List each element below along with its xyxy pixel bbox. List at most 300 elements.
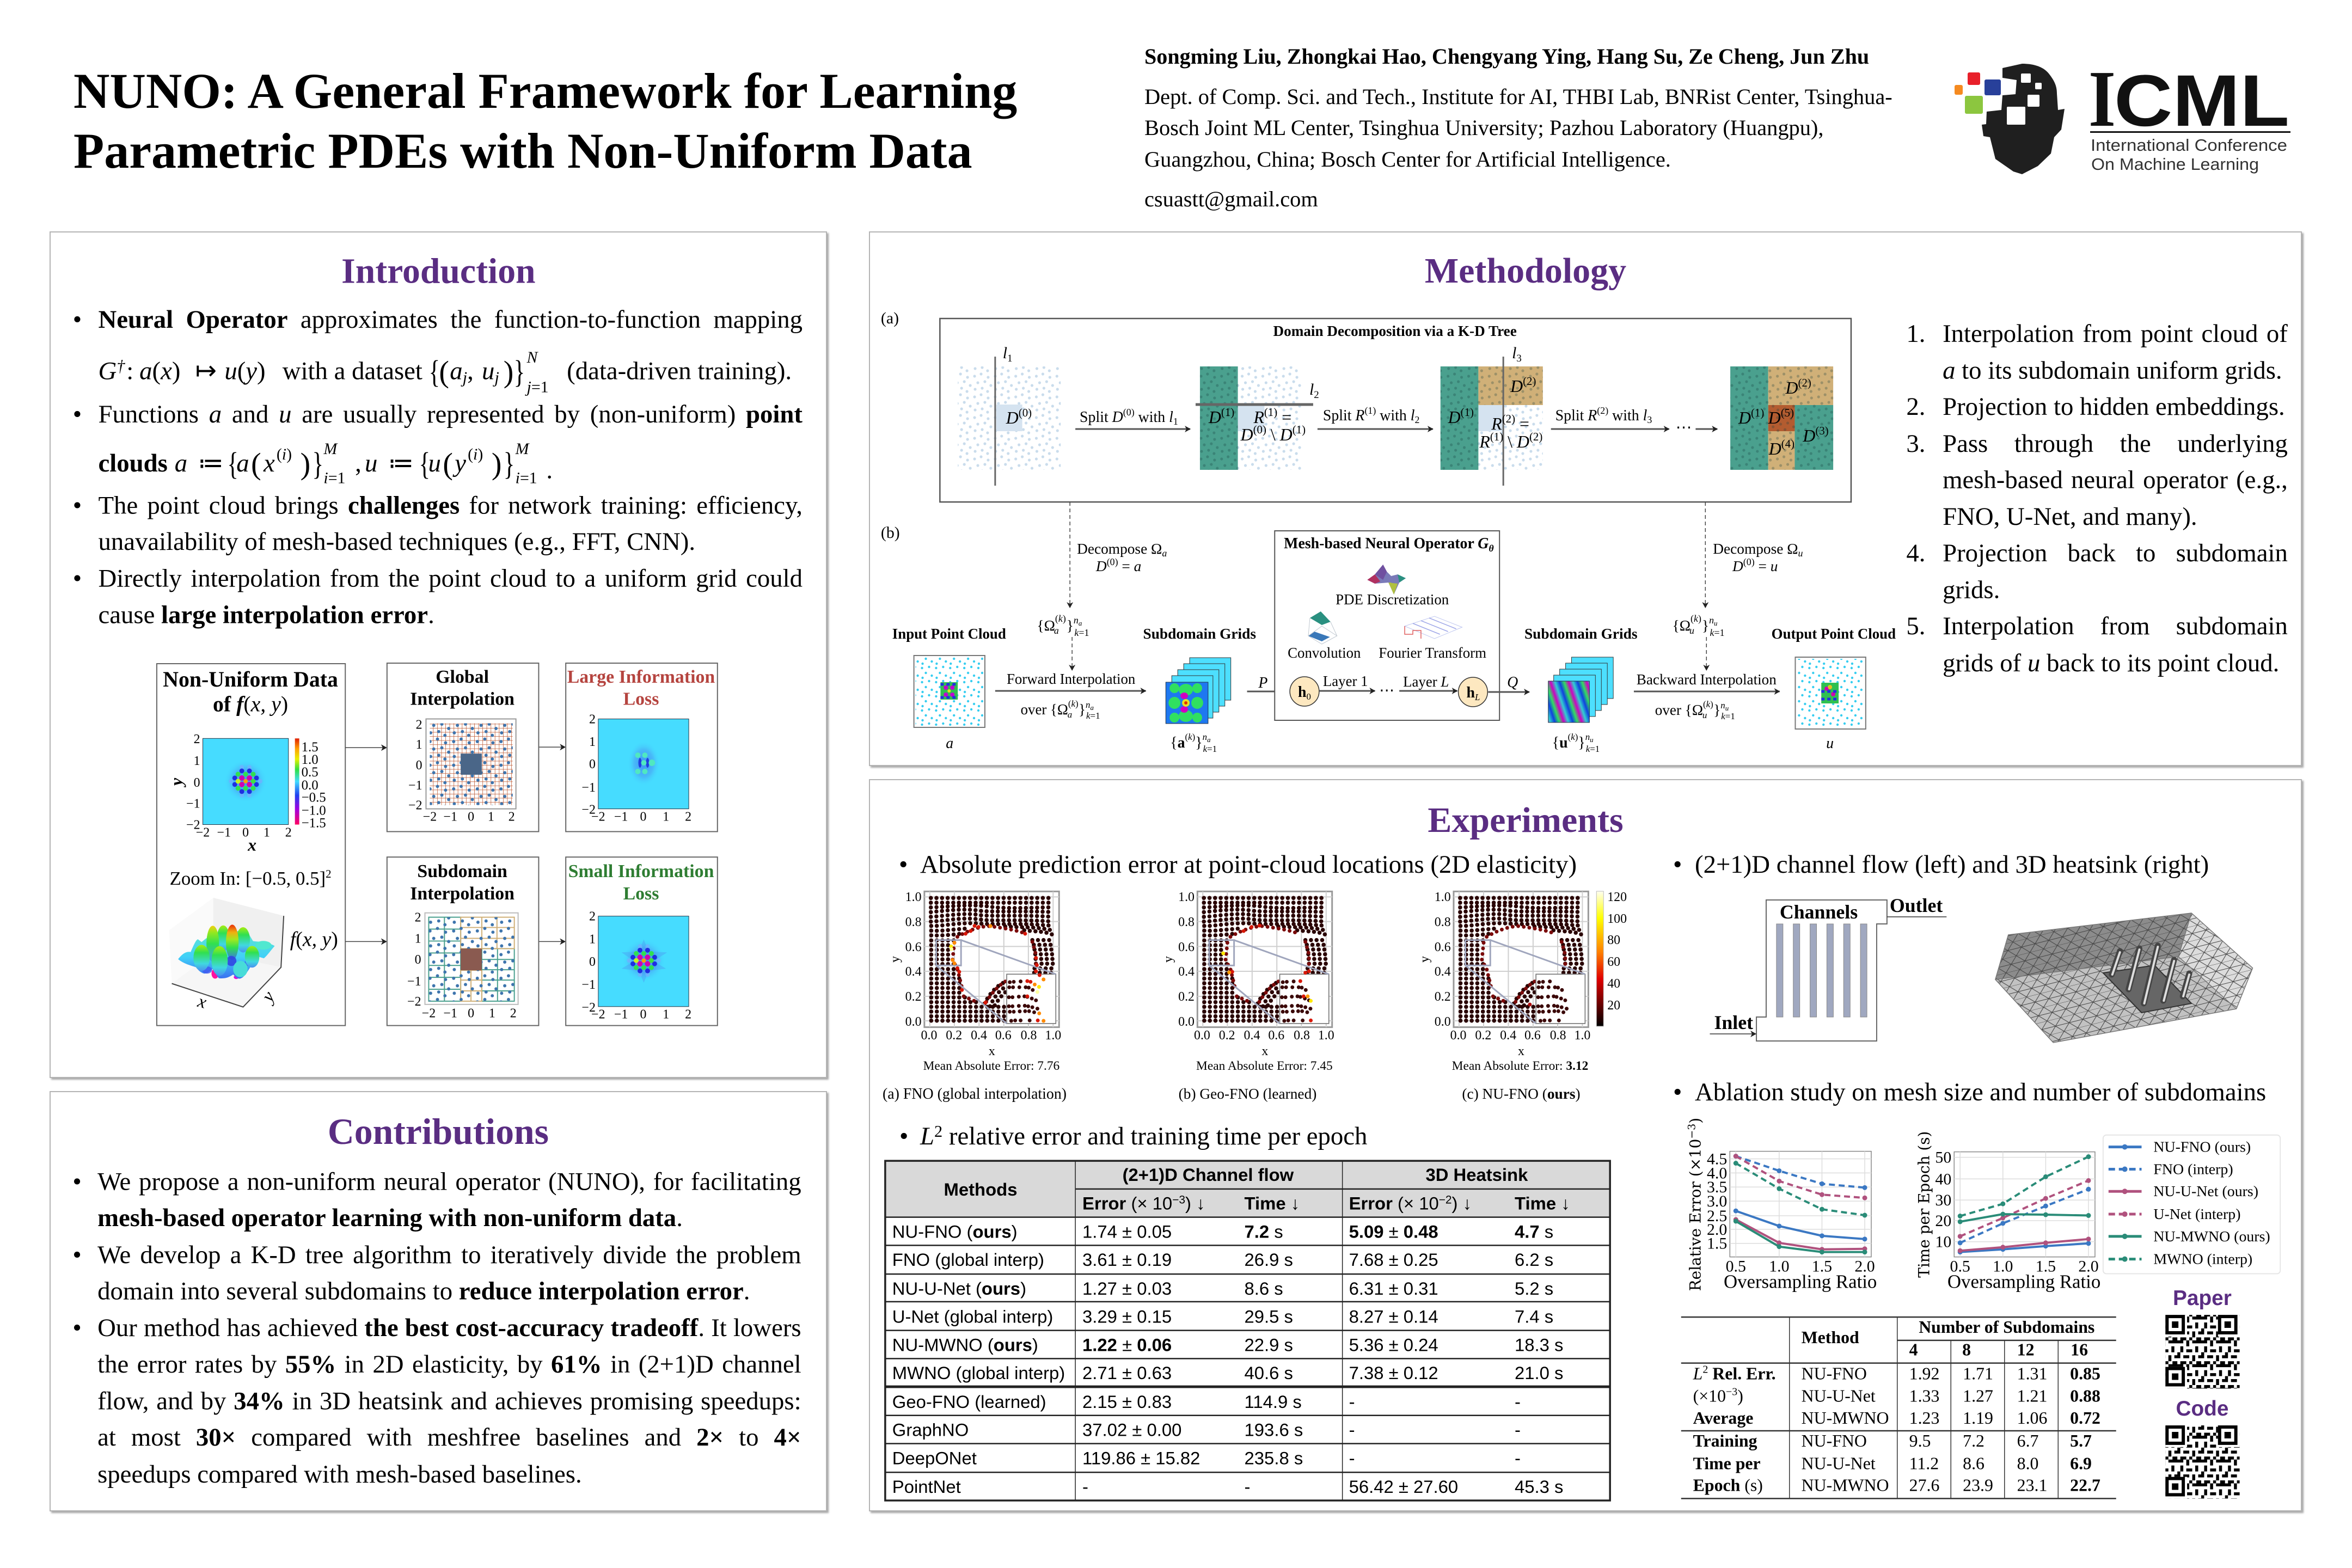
table rows: PointNet [892, 1477, 961, 1497]
input point cloud [892, 626, 1006, 752]
table rows: U-Net (global interp) [892, 1307, 1053, 1327]
table rows: 56.42 ± 27.60 [1349, 1477, 1458, 1497]
arrow Q [1488, 674, 1529, 692]
table rows: 6.31 ± 0.31 [1349, 1278, 1438, 1298]
text: introduction bullets: with a dataset [283, 357, 422, 385]
logo subtitle: International Conference [2091, 136, 2287, 155]
panel: global interpolation: 2 [415, 718, 422, 732]
text: introduction bullets: y [455, 449, 466, 477]
heatmap of f: −1.0 [302, 803, 326, 818]
error map: FNO: Mean Absolute Error: 7.76 [923, 1059, 1059, 1073]
heading: Contributions: Contributions [328, 1111, 549, 1152]
arrow: split R2: (2) [1597, 405, 1608, 416]
text: introduction bullets: { [419, 446, 430, 481]
diagram: 3D heatsink mesh [1995, 912, 2253, 1043]
error map: Geo-FNO: 0.6 [1178, 940, 1195, 954]
text: introduction bullets: } [504, 446, 514, 481]
text: introduction bullets: u [365, 449, 377, 477]
subdomain grids a: (k) [1185, 732, 1195, 742]
error map: Geo-FNO: Mean Absolute Error: 7.45 [1196, 1059, 1333, 1073]
panel: subdomain interpolation: 0 [414, 953, 421, 967]
panel: large information loss: 1 [663, 810, 669, 824]
table: subdomain study: 6.7 [2017, 1431, 2038, 1450]
table: subdomain study: 1.23 [1909, 1408, 1939, 1428]
panel: experiments: • [1673, 1078, 1682, 1106]
text: contribution bullets: mesh-based operator learning with non-uniform data. [97, 1204, 683, 1232]
panel: small information loss: −1 [614, 1008, 628, 1022]
panel: subdomain interpolation: 1 [489, 1007, 495, 1021]
step: second split: = [1515, 414, 1529, 433]
panel: small information loss: Loss [623, 884, 659, 904]
icon: Fourier transform [1405, 616, 1462, 639]
text: introduction bullets: ( [251, 448, 261, 481]
decompose labels: u [1771, 558, 1778, 574]
table: subdomain study: 1.71 [1963, 1364, 1993, 1383]
text: contribution bullets: • [72, 1241, 82, 1269]
panel: small information loss: 0 [589, 955, 596, 969]
panel: experiments: (2+1)D channel flow (left) and 3D heatsink (right) [1695, 850, 2209, 879]
panel: subdomain interpolation: 0 [468, 1007, 474, 1021]
error map: Geo-FNO: 1.0 [1178, 890, 1195, 904]
decompose labels: (k) [1055, 613, 1066, 624]
heatmap of f: 0.0 [302, 778, 318, 793]
panel: contributions [51, 1092, 826, 1510]
table: subdomain study: 23.1 [2017, 1475, 2047, 1494]
step: first split: l [1309, 381, 1314, 399]
table: subdomain study: NU-FNO [1802, 1364, 1867, 1383]
text: introduction bullets: (i) [277, 445, 292, 463]
decompose labels: Decompose Ω [1713, 541, 1798, 557]
error map: NU-FNO [1418, 890, 1590, 1102]
backward interpolation arrow: Backward Interpolation [1637, 671, 1777, 688]
subdomain grids u: n [1585, 732, 1594, 744]
step: second split: (1) [1490, 430, 1503, 443]
backward interpolation arrow: u [1725, 704, 1729, 712]
decompose labels: a [1162, 548, 1167, 559]
table rows: 235.8 s [1245, 1448, 1303, 1468]
error map: Geo-FNO: y [1161, 956, 1175, 963]
chart: relative error vs oversampling: Relative Error (×10 [1687, 1139, 1705, 1291]
table: subdomain study: 22.7 [2070, 1475, 2100, 1494]
text: introduction bullets: { [428, 354, 440, 389]
chart: time per epoch vs oversampling: 1.5 [2036, 1258, 2056, 1276]
panel: small information loss: −1 [581, 978, 596, 992]
table header: ) ↓ [1185, 1193, 1205, 1214]
subdomain grids a: {a [1170, 734, 1185, 751]
colorbar: 80 [1607, 933, 1620, 947]
step: initial point cloud: 1 [1007, 353, 1013, 364]
chart: relative error vs oversampling: 3.5 [1707, 1178, 1727, 1196]
panel: subdomain interpolation: 2 [414, 911, 421, 925]
QR: paper [2165, 1315, 2240, 1388]
table rows: - [1515, 1448, 1521, 1468]
label (a): (a) [881, 309, 899, 327]
text: introduction bullets: x [264, 449, 275, 477]
forward interpolation arrow: over {Ω [1021, 701, 1068, 718]
chart: relative error vs oversampling: 4.5 [1707, 1150, 1727, 1168]
text: numbered steps: Projection back to subdomain [1943, 539, 2288, 567]
table: subdomain study [1681, 1316, 2116, 1499]
table rows: 1.27 ± 0.03 [1082, 1278, 1172, 1298]
legend: NU-U-Net (ours) [2153, 1183, 2258, 1200]
QR codes: paper and code [2165, 1287, 2240, 1498]
text: contribution bullets: at most 30× compared with meshfree baselines and 2× to 4× [97, 1423, 801, 1451]
step: second split: D [1448, 408, 1461, 427]
panel: subdomain interpolation: Interpolation [410, 884, 514, 904]
table rows: 7.68 ± 0.25 [1349, 1250, 1438, 1270]
legend: NU-FNO (ours) [2153, 1139, 2251, 1156]
panel: large information loss: −1 [614, 810, 628, 824]
chart: time per epoch vs oversampling: Oversampling Ratio [1947, 1271, 2100, 1292]
subdomain grids a: } [1195, 734, 1203, 751]
step: final subdomains: (3) [1815, 424, 1829, 437]
text: introduction bullets: M [516, 440, 529, 458]
hidden layers: Layer L [1403, 673, 1449, 690]
heatmap of f: −0.5 [302, 791, 326, 805]
decompose labels: {Ω [1673, 617, 1690, 634]
error map: NU-FNO: 0.4 [1435, 965, 1451, 979]
arrow: split R1: l [1411, 407, 1415, 424]
text: introduction bullets: ↦ [195, 357, 217, 385]
text: introduction bullets: G† [98, 357, 125, 385]
panel: global interpolation: −1 [408, 779, 422, 793]
table: subdomain study: 0.88 [2070, 1386, 2100, 1405]
chart: relative error vs oversampling: 1.5 [1707, 1235, 1727, 1253]
table rows: 2.15 ± 0.83 [1082, 1392, 1172, 1412]
icon: PDE discretization surface [1367, 565, 1406, 595]
title: Parametric PDEs with Non-Uniform Data [74, 123, 972, 179]
text: introduction bullets: . [546, 456, 553, 484]
heatmap of f: 2 [194, 732, 200, 746]
panel: large information loss: 0 [640, 810, 646, 824]
chart: relative error vs oversampling: ) [1687, 1118, 1705, 1124]
step: final subdomains: (1) [1751, 406, 1764, 419]
text: introduction bullets: ) [301, 448, 310, 481]
panel: mesh-based neural operator [1275, 531, 1499, 720]
error map: FNO: 0.0 [905, 1015, 922, 1029]
table: subdomain study: 0.72 [2070, 1408, 2100, 1428]
panel: small information loss: 2 [685, 1008, 691, 1022]
panel: global interpolation: 0 [468, 810, 474, 824]
table rows: 18.3 s [1515, 1334, 1563, 1355]
bullet: L2 relative error [899, 1122, 1367, 1150]
text: contribution bullets: We develop a K-D tree algorithm to iteratively divide the problem [97, 1241, 801, 1269]
panel: K-D tree domain decomposition: Domain Decomposition via a K-D Tree [1273, 323, 1517, 339]
heatmap of f: 1.0 [302, 752, 318, 767]
error map: FNO: 0.4 [971, 1028, 987, 1043]
step: final subdomains: D [1803, 426, 1815, 445]
panel: mesh-based neural operator: θ [1489, 543, 1494, 554]
decompose labels: {Ω [1037, 617, 1055, 634]
text: numbered steps: Projection to hidden embeddings. [1943, 393, 2285, 421]
table rows: 21.0 s [1515, 1363, 1563, 1383]
heading: Introduction: Introduction [341, 252, 536, 291]
error map: NU-FNO: 1.0 [1575, 1028, 1590, 1043]
table: subdomain study: Time per [1693, 1454, 1761, 1473]
text: numbered steps: 3. [1906, 430, 1925, 458]
panel: global interpolation: 0 [415, 758, 422, 773]
table rows: - [1349, 1392, 1355, 1412]
text: introduction bullets: i=1 [516, 469, 537, 487]
step: second split: D [1510, 377, 1523, 396]
label f(x,y): f(x, y) [290, 928, 338, 951]
panel: large information loss [566, 663, 718, 831]
step: first split: R [1253, 408, 1264, 427]
error map: NU-FNO: 0.6 [1524, 1028, 1541, 1043]
table rows: 40.6 s [1245, 1363, 1293, 1383]
text: numbered steps: grids. [1943, 575, 2000, 604]
decompose labels: a [1079, 619, 1082, 627]
decompose labels: D [1732, 558, 1743, 574]
heatmap of f: 0.5 [302, 765, 318, 780]
decompose labels [1037, 541, 1803, 638]
table rows: MWNO (global interp) [892, 1363, 1065, 1383]
forward interpolation arrow: } [1079, 701, 1086, 718]
arrow: split R1: 2 [1415, 414, 1419, 425]
table rows [892, 1221, 1563, 1497]
table: subdomain study: 1.33 [1909, 1386, 1939, 1405]
panel: experiments [870, 780, 2301, 1510]
table rows: NU-MWNO (ours) [892, 1334, 1038, 1355]
panel: subdomain interpolation: −2 [422, 1007, 436, 1021]
table rows: 4.7 s [1515, 1221, 1553, 1241]
colorbar: 100 [1607, 912, 1627, 926]
hidden layers: h [1467, 684, 1475, 701]
panel: experiments: • [899, 1122, 908, 1150]
text: introduction bullets: a(x) [139, 357, 180, 385]
step: second split: 3 [1516, 353, 1522, 364]
table header: −2 [1439, 1194, 1452, 1206]
heatmap of f: −1.5 [302, 816, 326, 830]
table rows: 29.5 s [1245, 1307, 1293, 1327]
text: introduction bullets: • [73, 305, 82, 334]
panel: subdomain interpolation: Subdomain [417, 861, 507, 881]
arrow: split D0 [1075, 407, 1190, 429]
text: introduction bullets: , [355, 449, 362, 477]
error map: NU-FNO: (c) NU-FNO (ours) [1462, 1086, 1581, 1102]
bullet: ablation study [1673, 1078, 2266, 1106]
table rows: DeepONet [892, 1448, 977, 1468]
table rows: NU-U-Net (ours) [892, 1278, 1026, 1298]
backward interpolation arrow: } [1713, 702, 1720, 718]
chart: time per epoch vs oversampling: 0.5 [1950, 1258, 1970, 1276]
heatmap of f: −2 [186, 818, 200, 832]
heatmap of f: 1.5 [302, 740, 318, 755]
panel: small information loss: −2 [581, 1001, 596, 1015]
error map: Geo-FNO: 0.2 [1178, 990, 1195, 1004]
authors: Songming Liu, Zhongkai Hao, Chengyang Ying, Hang Su, Ze Cheng, Jun Zhu [1144, 44, 1869, 69]
table: subdomain study: Number of Subdomains [1919, 1318, 2094, 1337]
error map: FNO: (a) FNO (global interpolation) [883, 1086, 1067, 1102]
diagram: channel flow geometry: Outlet [1890, 895, 1943, 916]
3D surface: x [195, 991, 209, 1013]
bullet: channel flow and heatsink [1673, 850, 2209, 879]
colorbar: 120 [1607, 890, 1627, 904]
text: introduction bullets: M [323, 440, 337, 458]
text: introduction bullets: cause large interpolation error. [98, 601, 434, 629]
error map: NU-FNO: 0.6 [1435, 940, 1451, 954]
error map: FNO: x [989, 1044, 995, 1058]
table rows: GraphNO [892, 1420, 969, 1440]
panel: experiments: • [899, 850, 908, 879]
arrow: split D0: (0) [1123, 407, 1135, 418]
error map: NU-FNO: 0.0 [1450, 1028, 1467, 1043]
panel: small information loss [566, 857, 718, 1026]
table rows: FNO (global interp) [892, 1250, 1044, 1270]
error map: NU-FNO: 0.0 [1435, 1015, 1451, 1029]
error map: FNO: 0.8 [1021, 1028, 1037, 1043]
heatmap of f: y [167, 777, 186, 788]
step: second split: \ [1503, 432, 1517, 451]
error map: NU-FNO: y [1418, 956, 1432, 963]
hidden layers: L [1474, 692, 1480, 702]
table: subdomain study: 8 [1962, 1340, 1971, 1359]
backward interpolation arrow: n [1720, 700, 1729, 712]
step: first split: (1) [1293, 423, 1306, 436]
error map: Geo-FNO: 1.0 [1318, 1028, 1334, 1043]
table: subdomain study: 27.6 [1909, 1475, 1939, 1494]
text: introduction bullets: • [73, 491, 82, 519]
arrow: split R1: with [1376, 407, 1411, 424]
panel: K-D tree domain decomposition [940, 318, 1851, 502]
arrow P [1247, 675, 1289, 691]
step: final subdomains: D [1768, 408, 1781, 427]
heatmap of f: 0 [242, 825, 249, 840]
panel: small information loss: 2 [589, 910, 596, 924]
step: first split: = [1277, 408, 1291, 427]
panel: experiments: Ablation study on mesh size and number of subdomains [1695, 1078, 2266, 1106]
colorbar [1596, 890, 1627, 1026]
step: final subdomains: D [1786, 378, 1798, 397]
decompose labels: } [1702, 617, 1709, 634]
forward interpolation arrow: a [1068, 709, 1072, 720]
text: contribution bullets: flow, and by 34% in 3D heatsink and achieves promising speedups: [97, 1387, 801, 1415]
error map: FNO: y [889, 956, 903, 963]
arrow: split R2: 3 [1647, 414, 1652, 425]
affiliations: Dept. of Comp. Sci. and Tech., Institute for AI, THBI Lab, BNRist Center, Tsinghua- [1144, 84, 1892, 109]
chart: time per epoch vs oversampling: Time per Epoch (s) [1915, 1131, 1933, 1278]
forward interpolation arrow: n [1086, 700, 1094, 712]
affiliations: Bosch Joint ML Center, Tsinghua University; Pazhou Laboratory (Huangpu), [1144, 115, 1823, 140]
figure: error maps [883, 890, 1627, 1102]
text: introduction bullets: : [126, 357, 133, 385]
logo wordmark: I [2088, 54, 2116, 144]
table header: (2+1)D Channel flow [1123, 1165, 1294, 1185]
arrow: split R1: (1) [1364, 405, 1376, 416]
bullet: absolute prediction error [899, 850, 1577, 879]
panel: large information loss: Large Information [567, 667, 715, 687]
error map: NU-FNO: 0.8 [1435, 915, 1451, 929]
step: first split: D [1280, 425, 1293, 444]
panel: experiments: Absolute prediction error at point-cloud locations (2D elasticity) [920, 850, 1577, 879]
arrow: split D0: Split D [1080, 409, 1123, 426]
panel: mesh-based neural operator: PDE Discretization [1336, 591, 1449, 608]
panel: non-uniform data: of f(x, y) [213, 692, 288, 716]
hidden layers: ⋯ [1379, 682, 1394, 699]
text: introduction bullets: • [73, 400, 82, 428]
table: subdomain study: 6.9 [2070, 1454, 2092, 1473]
table rows: 5.09 ± 0.48 [1349, 1221, 1438, 1241]
error map: NU-FNO: 1.0 [1435, 890, 1451, 904]
panel: experiments: L2 relative error and training time per epoch [920, 1122, 1367, 1150]
table header: 3D Heatsink [1425, 1165, 1528, 1185]
error map: Geo-FNO: 0.8 [1178, 915, 1195, 929]
subdomain grids u: u [1590, 736, 1594, 744]
table: subdomain study: −3 [1726, 1386, 1737, 1398]
subdomain grids u: k=1 [1586, 744, 1600, 754]
legend: NU-MWNO (ours) [2153, 1228, 2270, 1245]
decompose labels: (0) [1107, 556, 1118, 568]
chart: time per epoch vs oversampling: 30 [1935, 1191, 1951, 1209]
backward interpolation arrow: u [1702, 710, 1707, 720]
table rows: 1.74 ± 0.05 [1082, 1221, 1172, 1241]
table rows: - [1349, 1420, 1355, 1440]
error map: Geo-FNO: 0.2 [1219, 1028, 1235, 1043]
panel: global interpolation: 1 [488, 810, 494, 824]
3D surface [169, 898, 284, 1013]
zoom label: Zoom In: [−0.5, 0.5] [170, 868, 326, 889]
subdomain grids a: n [1203, 732, 1211, 744]
step: final subdomains: (2) [1798, 376, 1811, 389]
table: subdomain study: (×10 [1693, 1386, 1726, 1405]
panel: subdomain interpolation: −2 [407, 995, 421, 1009]
arrows row 2 [345, 941, 565, 942]
panel: introduction [51, 232, 826, 1077]
text: introduction bullets: i=1 [323, 469, 345, 487]
forward interpolation arrow: (k) [1068, 699, 1079, 709]
colorbar: 40 [1607, 977, 1620, 991]
text: introduction bullets [73, 305, 803, 629]
text: numbered steps: Interpolation from subdomain [1943, 612, 2288, 640]
error map: Geo-FNO: 0.4 [1244, 1028, 1260, 1043]
table rows: 193.6 s [1245, 1420, 1303, 1440]
step: first split: (1) [1264, 406, 1277, 419]
step: first split: \ [1266, 425, 1280, 444]
panel: small information loss: 1 [663, 1008, 669, 1022]
chart: time per epoch vs oversampling: 10 [1935, 1233, 1951, 1251]
arrow: split R1: Split R [1323, 407, 1364, 424]
table header: Time ↓ [1515, 1193, 1570, 1214]
hidden layers: 0 [1307, 691, 1311, 702]
forward interpolation arrow: a [1091, 703, 1094, 712]
error map: NU-FNO: Mean Absolute Error: 3.12 [1452, 1059, 1588, 1073]
panel: non-uniform data [157, 664, 345, 1026]
table: subdomain study: 23.9 [1963, 1475, 1993, 1494]
error map: Geo-FNO: 0.6 [1268, 1028, 1284, 1043]
affiliations: Guangzhou, China; Bosch Center for Artificial Intelligence. [1144, 147, 1671, 171]
error map: NU-FNO: x [1518, 1044, 1524, 1058]
table: subdomain study: 1.21 [2017, 1386, 2047, 1405]
subdomain grids a: Subdomain Grids [1143, 626, 1256, 642]
table rows: - [1515, 1420, 1521, 1440]
arrow: split R2: Split R [1555, 407, 1597, 424]
text: introduction bullets: Directly interpolation from the point cloud to a uniform grid could [98, 565, 803, 592]
text: contribution bullets: • [72, 1314, 82, 1342]
text: numbered steps: 2. [1906, 393, 1925, 421]
step: first split: 2 [1314, 389, 1319, 401]
table header: Error (× 10 [1349, 1193, 1439, 1214]
arrow: split R1 [1318, 405, 1433, 429]
text: contribution bullets: domain into several subdomains to reduce interpolation error. [97, 1277, 750, 1306]
table: subdomain study: 1.06 [2017, 1408, 2047, 1428]
table: subdomain study: Rel. Err. [1708, 1364, 1776, 1383]
table rows: 3.29 ± 0.15 [1082, 1307, 1172, 1327]
arrow: split R2: l [1643, 407, 1647, 424]
table rows: 45.3 s [1515, 1477, 1563, 1497]
error map: FNO: 0.6 [905, 940, 922, 954]
table header: −3 [1172, 1194, 1185, 1206]
text: introduction bullets: a [236, 449, 249, 477]
